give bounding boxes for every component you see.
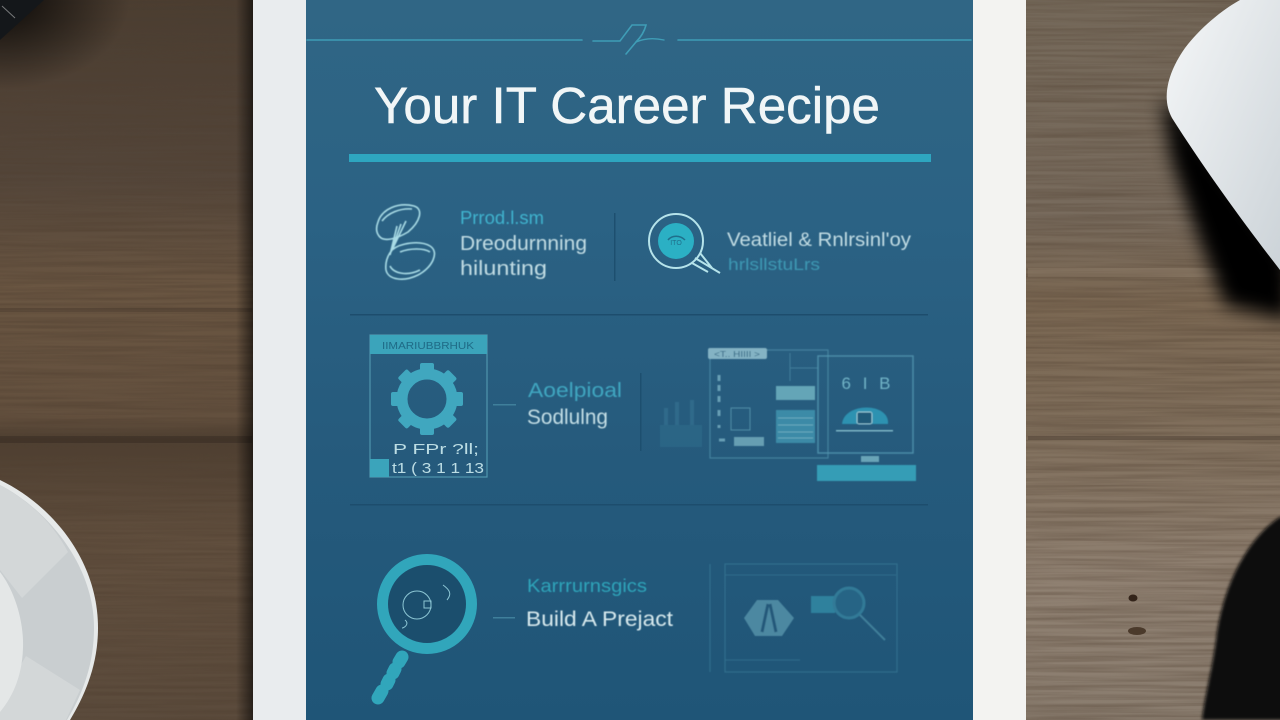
teal base bar [817,465,916,481]
mini bar chart [660,400,702,447]
text: programming labels: Dreodurnning [460,233,587,255]
section 5: magnifier [378,560,472,698]
connector [493,617,515,618]
black object bottom right [1202,517,1280,720]
card header [370,335,487,354]
text: programming labels: hilunting [460,258,547,280]
text: build a project: Karrrurnsgics [527,576,647,596]
icon: teal lens with handle [649,214,720,273]
section 3: gear card: P FPr ?ll; [393,441,479,458]
icon: hexagon [744,600,794,636]
section 4: dashboard wireframes [660,348,916,481]
icon: small search [811,588,885,640]
dark keyboard corner [0,0,130,90]
text: programming labels: Prrod.l.sm [460,208,544,228]
knots in the wood [1128,594,1146,635]
section 3: gear card: t1 ( 3 1 1 13 [392,460,484,477]
icon: magnifier ring [382,560,472,648]
icon: teal lens with handle: ITO [670,240,682,247]
section 6: project wireframe [710,564,897,672]
section 1: programming item [377,205,587,280]
text: programming labels [460,208,587,280]
section 3: gear card [370,335,487,477]
section 3: gear card: IIMARIUBBRHUK [382,341,474,352]
section separator [350,504,928,506]
list window: <T.. HIIII > [714,350,760,359]
vertical divider [640,373,642,451]
side cards [776,386,815,400]
section separator [350,314,928,316]
text: analytical solving: Aoelpioal [528,380,622,402]
card footer glyphs [370,459,389,477]
text: search labels: Veatliel & Rnlrsinl'oy [727,230,912,251]
text: build a project [526,576,673,631]
monitor [818,356,913,453]
blue poster panel [306,0,973,720]
vertical divider [614,213,616,281]
icon: gear [391,363,463,435]
section 2: search item [649,214,912,274]
text: analytical solving [527,380,622,429]
icon: knot outline [377,205,434,279]
text: search labels [727,230,912,274]
text: build a project: Build A Prejact [526,608,673,631]
title: Your IT Career Recipe [374,77,880,134]
top ornament line [307,25,971,54]
white saucer and cup [0,480,98,720]
monitor: 6 I B [842,374,890,393]
card outline [370,335,487,477]
white poster frame [253,0,1026,720]
text: analytical solving: Sodlulng [527,406,608,429]
icon: magnifier handle [378,657,402,698]
text: search labels: hrlsllstuLrs [728,255,820,274]
connector [493,404,516,406]
list window [708,348,828,458]
white mouse with shadow [1162,0,1280,320]
title underline [349,154,931,162]
inner sketch [402,585,450,628]
